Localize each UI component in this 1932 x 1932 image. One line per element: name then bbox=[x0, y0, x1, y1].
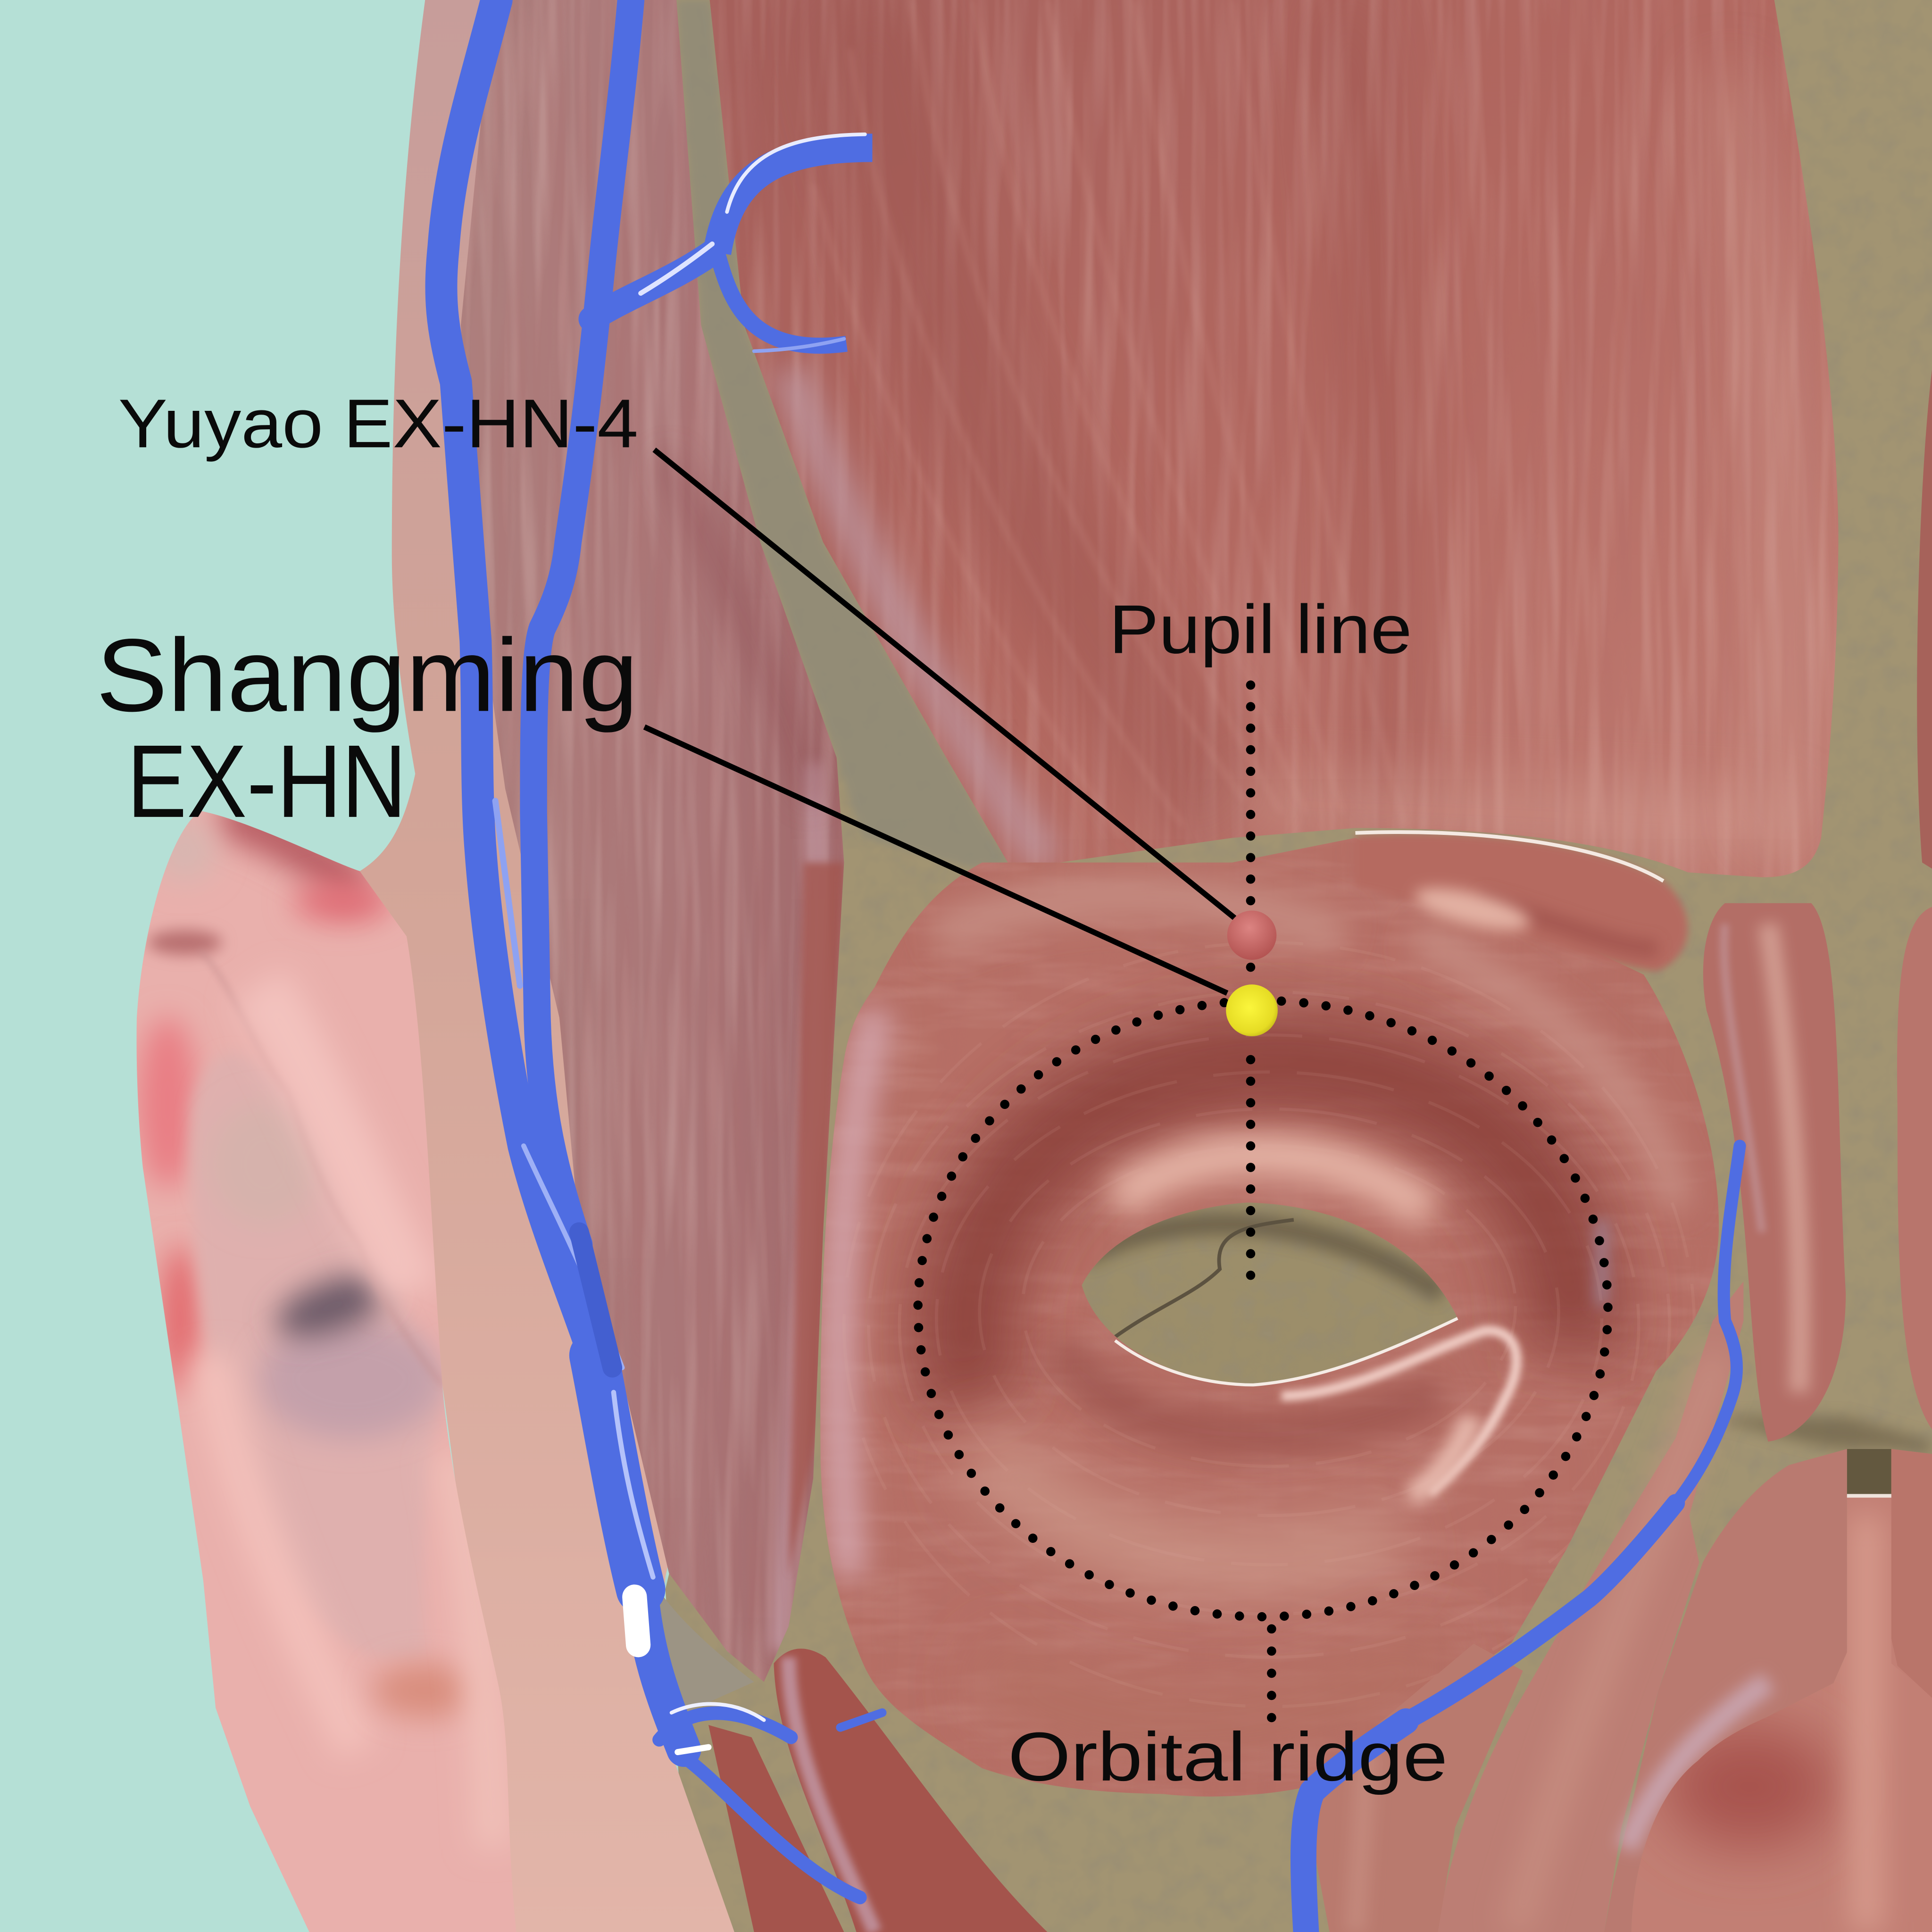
temporalis muscle bbox=[443, 0, 863, 1688]
frontalis muscle bbox=[690, 0, 1860, 887]
dotted orbital ridge leader bbox=[1270, 1629, 1274, 1720]
zygomaticus muscle bbox=[1438, 1282, 1743, 1932]
label: Orbital ridge: Orbital ridge bbox=[1008, 1718, 1448, 1795]
dotted orbital ridge ellipse bbox=[918, 1001, 1608, 1617]
skin of the head bbox=[360, 0, 739, 1932]
eye opening bbox=[1072, 1195, 1466, 1392]
point: Shangming bbox=[1226, 984, 1278, 1036]
title: EX-HN: EX-HN bbox=[127, 724, 407, 839]
bone patch bbox=[647, 1581, 754, 1719]
lower left muscles bbox=[708, 1649, 1047, 1932]
dotted pupil line bbox=[1249, 685, 1252, 1276]
veins bbox=[441, 0, 1740, 1932]
corrugator muscle bbox=[1355, 832, 1688, 971]
levator muscle bbox=[1604, 1449, 1847, 1932]
far right muscles bbox=[1897, 370, 1932, 1429]
title: Shangming: Shangming bbox=[96, 617, 638, 733]
label: Yuyao EX-HN-4: Yuyao EX-HN-4 bbox=[118, 385, 638, 462]
orbicularis oculi muscle bbox=[801, 813, 1737, 1811]
label: Pupil line: Pupil line bbox=[1109, 591, 1412, 667]
leader line: Yuyao bbox=[654, 450, 1234, 918]
nose muscle bbox=[1632, 1449, 1932, 1932]
point: Yuyao bbox=[1227, 910, 1276, 960]
skull background bbox=[666, 0, 1932, 1932]
ear bbox=[137, 811, 516, 1932]
procerus muscle bbox=[1703, 903, 1846, 1441]
vein highlights bbox=[495, 134, 865, 1752]
lower lip elevator muscle bbox=[1302, 1644, 1523, 1932]
leader line: Shangming bbox=[644, 727, 1227, 993]
